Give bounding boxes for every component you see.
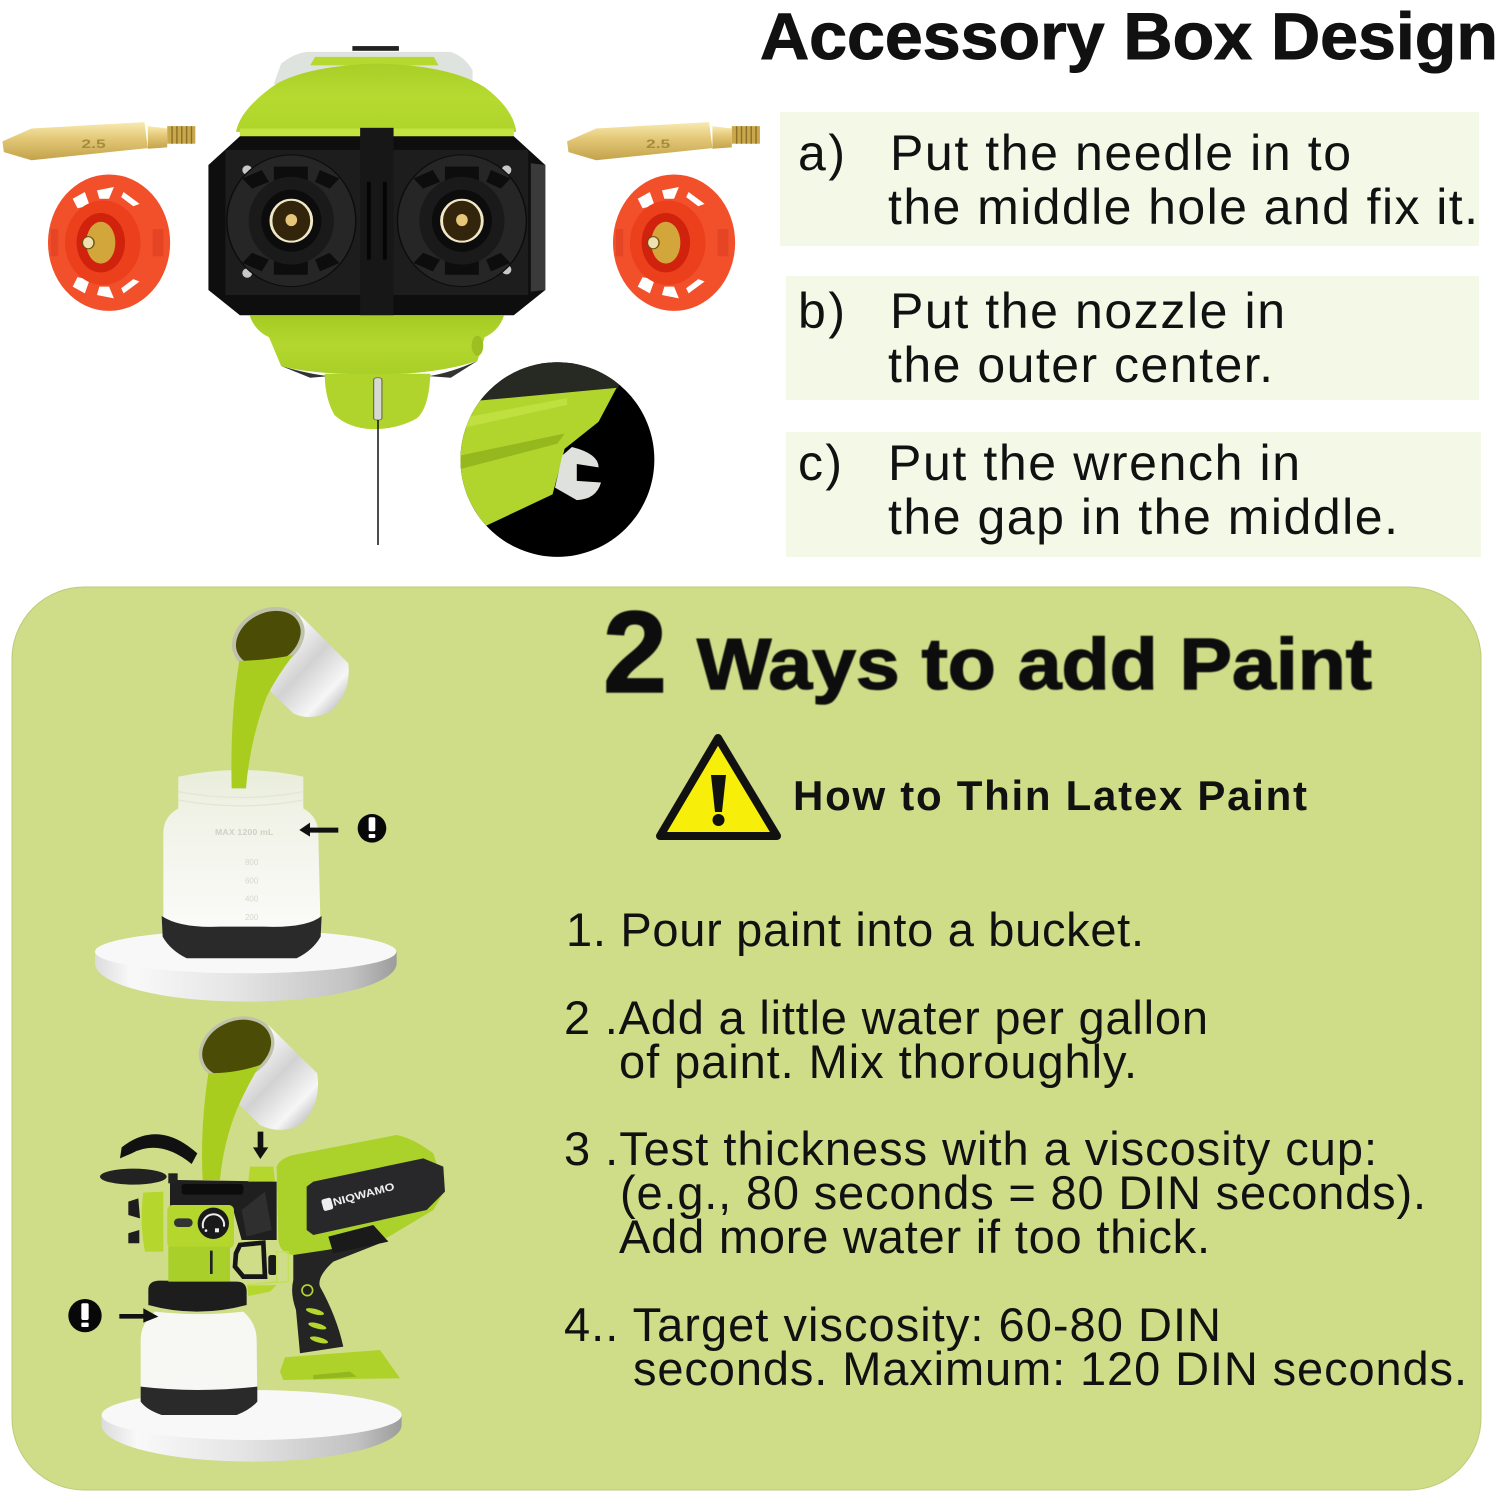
cup: MAX 1200 mL <box>215 827 274 837</box>
icon: right brass needle: 2.5 <box>646 138 670 151</box>
cup: 600 <box>245 876 259 885</box>
step 3: 3 .Test thickness with a viscosity cup: <box>564 1122 1377 1175</box>
logo: NIQWAMO <box>332 1181 396 1209</box>
panel: step c <box>786 432 1481 557</box>
panel: step a: the middle hole and fix it. <box>888 179 1478 235</box>
icon: notice <box>68 1299 102 1332</box>
rear body <box>277 1135 445 1255</box>
cup: 800 <box>245 858 259 867</box>
battery base <box>280 1350 400 1380</box>
step 3: Add more water if too thick. <box>619 1210 1210 1263</box>
inset: wrench detail <box>456 361 659 560</box>
can <box>191 1007 318 1130</box>
step 2 <box>564 991 1208 1088</box>
cup <box>162 770 322 958</box>
panel: step a: a) <box>798 125 845 181</box>
arrow: pour down <box>253 1132 268 1159</box>
illustration: pouring paint into sprayer <box>68 1007 445 1462</box>
panel: step b: b) <box>798 283 845 339</box>
steps list <box>564 903 1467 1395</box>
can <box>224 597 349 717</box>
step 3 <box>564 1122 1426 1263</box>
heading: 2 Ways to add Paint <box>603 587 1372 717</box>
dial <box>198 1208 229 1239</box>
panel: step c: the gap in the middle. <box>888 489 1398 545</box>
heading: 2 Ways to add Paint: 2 <box>603 587 667 717</box>
cup: 200 <box>245 913 259 922</box>
icon: left brass needle: 2.5 <box>81 138 106 151</box>
title: Accessory Box Design: Accessory Box Design <box>760 0 1498 73</box>
step 2: of paint. Mix thoroughly. <box>619 1035 1137 1088</box>
subheading: How to Thin Latex Paint: How to Thin Latex Paint <box>793 772 1307 819</box>
illustration: accessory box head <box>208 46 545 429</box>
left disc <box>227 155 356 287</box>
paint stream <box>231 655 293 788</box>
open lid <box>100 1169 178 1185</box>
icon: right red nozzle <box>613 174 735 311</box>
panel: step b: Put the nozzle in <box>890 283 1285 339</box>
sprayer gun <box>100 1135 445 1380</box>
nozzle front <box>142 1192 163 1252</box>
paint stream <box>202 1065 260 1180</box>
heading: 2 Ways to add Paint: Ways to add Paint <box>697 625 1372 705</box>
trigger <box>235 1243 265 1277</box>
step 1: 1. Pour paint into a bucket. <box>566 903 1144 956</box>
arrow <box>299 823 338 837</box>
centre strap <box>360 128 394 317</box>
panel: 2 ways to add paint background <box>12 587 1481 1490</box>
icon: left red nozzle <box>48 174 170 311</box>
platform <box>95 930 397 1002</box>
cup: 400 <box>245 895 259 904</box>
tab with wrench slit <box>325 374 430 429</box>
right disc <box>397 155 526 287</box>
step 4: 4.. Target viscosity: 60-80 DIN <box>564 1298 1221 1351</box>
step 4 <box>564 1298 1467 1395</box>
arrow: jar <box>119 1308 158 1323</box>
panel: step b: the outer center. <box>888 337 1273 393</box>
icon: right brass needle <box>567 122 760 160</box>
platform <box>102 1390 402 1462</box>
lower green shell <box>250 315 504 374</box>
black panel <box>307 1158 445 1235</box>
paint jar <box>141 1281 257 1415</box>
pointer line <box>377 420 379 545</box>
panel: step a <box>780 112 1479 246</box>
panel: step b <box>786 276 1479 400</box>
step 4: seconds. Maximum: 120 DIN seconds. <box>633 1342 1467 1395</box>
logo <box>321 1181 396 1211</box>
step 3: (e.g., 80 seconds = 80 DIN seconds). <box>620 1166 1426 1219</box>
step 2: 2 .Add a little water per gallon <box>564 991 1208 1044</box>
icon: warning triangle <box>660 738 777 836</box>
front green <box>167 1205 234 1248</box>
panel: step c: c) <box>798 435 842 491</box>
panel: step a: Put the needle in to <box>890 125 1351 181</box>
mid block <box>170 1180 277 1240</box>
icon: left brass needle <box>2 122 195 160</box>
box body <box>208 136 545 315</box>
illustration: pouring paint into cup <box>95 597 397 1002</box>
icon: notice <box>358 814 386 843</box>
panel: step c: Put the wrench in <box>888 435 1300 491</box>
handle <box>292 1240 388 1353</box>
arrow: lid open <box>120 1134 197 1164</box>
